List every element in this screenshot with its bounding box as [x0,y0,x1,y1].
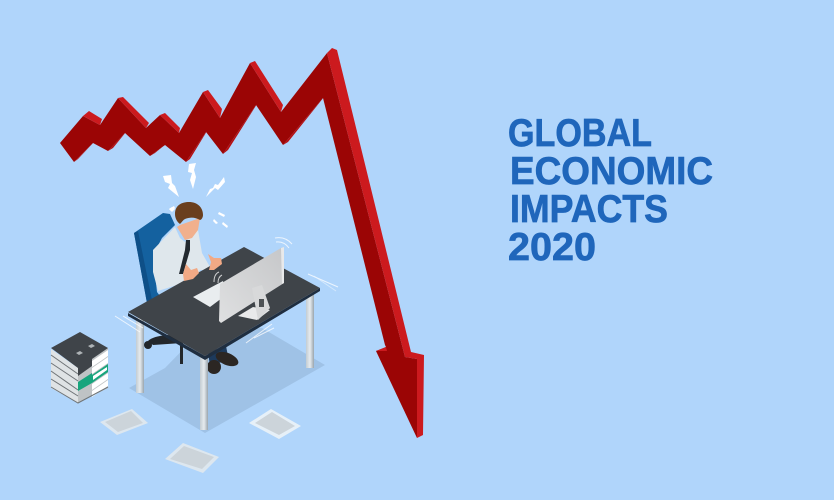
desk [128,247,320,430]
icon: stress lightning bolts [163,163,228,228]
title: IMPACTS [510,188,668,231]
papers on floor [100,409,301,473]
stack of binders [51,332,108,403]
trousers and shoes [207,346,240,374]
motion lines [115,238,338,343]
desk floor shadow [129,328,325,433]
businessman at desk [153,202,210,291]
hands over desk [183,254,222,281]
title: GLOBAL [508,112,652,155]
title: ECONOMIC [510,150,713,193]
title [508,112,713,269]
office chair [134,213,183,364]
falling red arrow chart [60,48,424,438]
title: 2020 [508,226,596,269]
computer monitor [219,247,284,323]
keyboard [193,281,226,307]
